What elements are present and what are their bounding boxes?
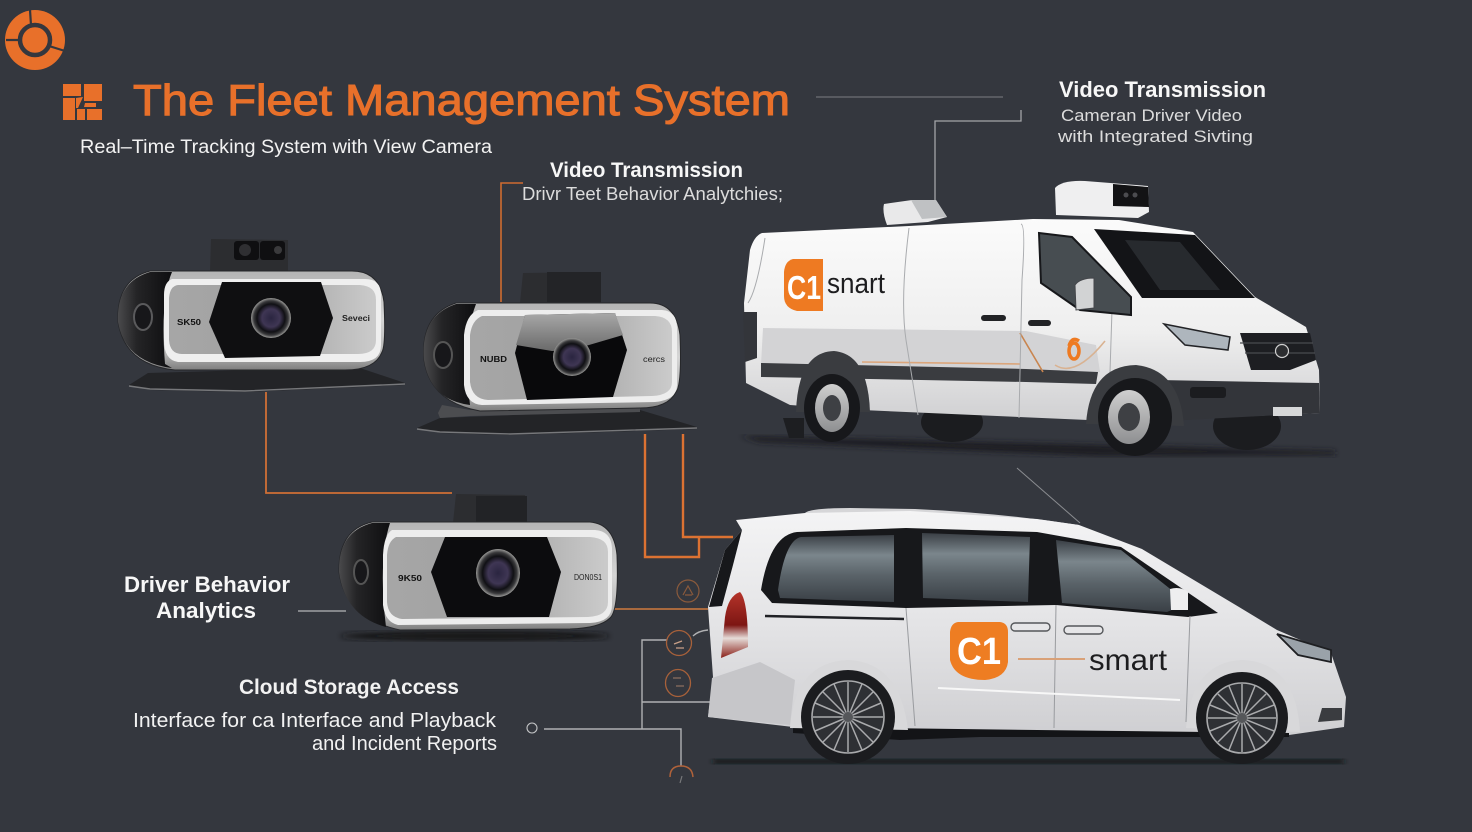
van grille <box>1240 333 1316 370</box>
van rear wordmark: snart <box>827 268 885 300</box>
carrier tail light <box>721 592 748 658</box>
text block: cloud storage access: and Incident Reports <box>312 733 497 755</box>
text block: driver behavior analytics <box>124 572 290 623</box>
carrier side strip <box>765 616 904 619</box>
carrier glass front <box>1056 540 1188 612</box>
carrier rear dark pillar <box>709 530 742 607</box>
carrier headlight <box>1277 634 1331 662</box>
carrier body shell <box>708 511 1346 735</box>
icon: top-left brand ring logo <box>5 10 65 70</box>
carrier front wheel <box>1186 660 1300 764</box>
van door handles <box>981 315 1051 326</box>
carrier door handles <box>1011 623 1103 634</box>
carrier wordmark: smart <box>1089 644 1168 677</box>
camera 3 <box>339 494 617 641</box>
camera 2 label left: NUBD <box>480 355 507 364</box>
connector: grey cloud storage tree <box>544 630 711 766</box>
text block: top right video transmission: with Integrated Sivting <box>1057 127 1253 146</box>
carrier window frame <box>761 528 1218 617</box>
van rear wheel <box>783 351 870 442</box>
text block: middle video transmission <box>522 159 783 204</box>
van mirror <box>1075 278 1094 310</box>
van roof camera left <box>883 200 947 225</box>
van ground shadow <box>740 436 1335 456</box>
title: The Fleet Management System <box>133 76 790 125</box>
camera 1 label right: Seveci <box>342 314 370 323</box>
carrier glass middle <box>922 533 1030 602</box>
van body shell <box>744 219 1320 420</box>
van panel seams <box>748 224 1112 418</box>
camera 3 ground shadow <box>340 631 610 641</box>
camera 2 top module <box>520 272 601 303</box>
carrier rear panel shading <box>708 662 795 725</box>
carrier logo rule <box>1018 658 1085 660</box>
van grey lower panel <box>761 328 1100 372</box>
text block: middle video transmission: Drivr Teet Behavior Analytchies; <box>522 184 783 204</box>
van windshield <box>1094 229 1255 298</box>
van front bumper <box>1158 380 1320 421</box>
carrier orange logo: C1 <box>957 631 1001 673</box>
connector: orange line camera 2 to video transmission <box>501 183 523 302</box>
van roof camera right <box>1055 181 1149 218</box>
van door orange emblem <box>1069 339 1079 359</box>
van orange trim lines <box>862 333 1105 372</box>
van dark side stripe <box>761 363 1098 384</box>
connector: grey title rule <box>816 96 1003 98</box>
connector: grey line to van roof camera <box>935 110 1021 203</box>
camera 2 base stand <box>417 405 697 435</box>
antenna line <box>1017 468 1080 523</box>
camera 1 <box>118 239 405 392</box>
connector: orange line camera 3 to people carrier <box>614 608 708 610</box>
van rear logo <box>784 259 823 311</box>
carrier underbody <box>793 727 1289 740</box>
van front wheel <box>1086 365 1184 456</box>
camera 2 <box>417 272 697 435</box>
icon: orange half arc <box>670 766 693 783</box>
carrier glass rear <box>778 535 894 602</box>
camera 3 top module <box>453 494 527 524</box>
text block: driver behavior analytics: Driver Behavior <box>124 572 290 597</box>
people carrier <box>708 508 1346 764</box>
carrier roof rail <box>805 508 1079 528</box>
connector: orange line camera 1 to camera 3 <box>266 392 452 493</box>
connector: driver behavior rule <box>298 610 346 612</box>
carrier orange logo <box>950 622 1008 680</box>
carrier door seams <box>906 605 1190 728</box>
text block: cloud storage access: Cloud Storage Access <box>239 676 459 699</box>
icon: orange circle three <box>666 670 690 696</box>
camera 2 label right: cercs <box>643 355 665 364</box>
camera 1 body <box>118 271 385 370</box>
van headlight <box>1164 324 1230 350</box>
van rear door dark edge <box>743 312 757 362</box>
camera 2 body <box>424 303 680 411</box>
text block: middle video transmission: Video Transmission <box>550 159 743 182</box>
text block: top right video transmission <box>1057 77 1266 146</box>
icon: small node circle <box>527 723 537 733</box>
carrier front lamp <box>1318 708 1342 722</box>
carrier rear wheel <box>790 660 908 764</box>
text block: top right video transmission: Cameran Driver Video <box>1061 106 1242 125</box>
camera 3 label right: DON0S1 <box>574 573 602 582</box>
van rear logo: C1 <box>787 269 821 306</box>
camera 1 base stand <box>129 367 405 392</box>
subtitle: Real–Time Tracking System with View Camera <box>80 137 492 158</box>
van cab window <box>1039 233 1131 315</box>
text block: driver behavior analytics: Analytics <box>156 598 256 623</box>
camera 3 body <box>339 522 617 630</box>
panel van <box>740 181 1335 456</box>
text block: cloud storage access <box>133 676 497 755</box>
icon: square title mark <box>63 84 102 120</box>
camera 1 label left: SK50 <box>177 318 202 327</box>
icon: orange circle two <box>666 630 692 656</box>
camera 3 label left: 9K50 <box>398 574 423 583</box>
carrier ground shadow <box>713 759 1344 764</box>
carrier mirror <box>1170 588 1188 610</box>
text block: top right video transmission: Video Transmission <box>1059 77 1266 102</box>
connector: orange lines camera 2 to people carrier <box>645 434 733 557</box>
text block: cloud storage access: Interface for ca Interface and Playback <box>133 710 497 732</box>
van far side wheels <box>921 402 1281 450</box>
icon: orange circle one <box>677 580 699 602</box>
camera 1 top module <box>210 239 288 271</box>
